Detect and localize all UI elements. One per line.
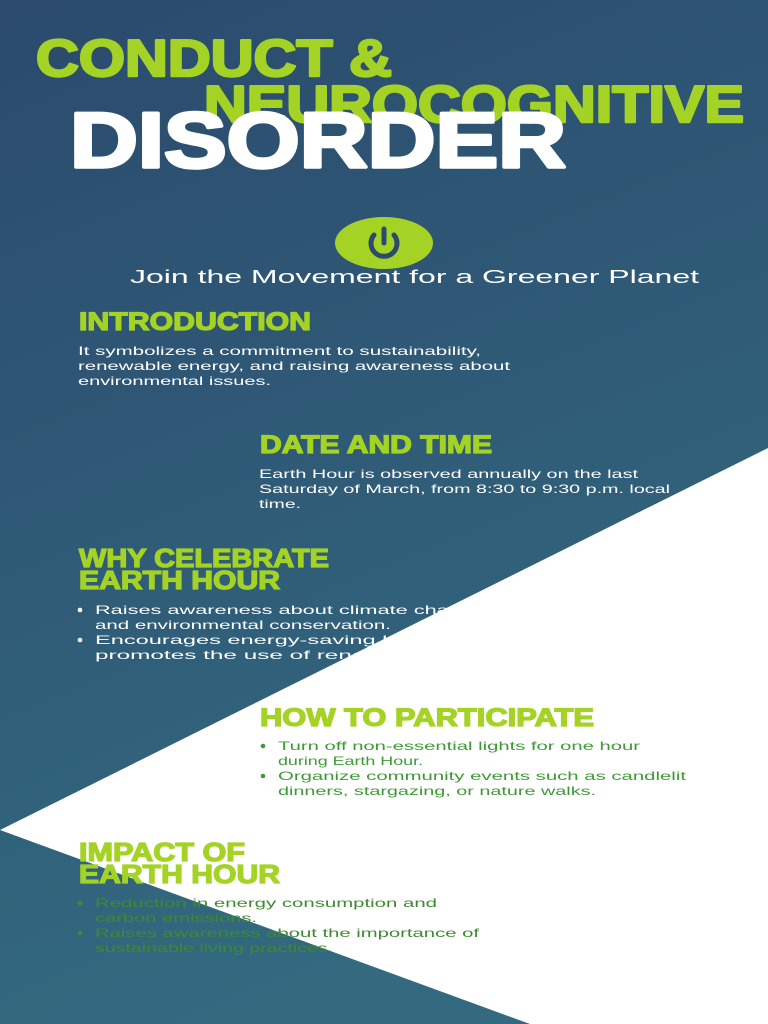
section: how to participate: HOW TO PARTICIPATE bbox=[260, 704, 594, 732]
section: date and time: time. bbox=[259, 497, 301, 511]
section: introduction: environmental issues. bbox=[78, 374, 271, 388]
section: date and time: Saturday of March, from 8:30 to 9:30 p.m. local bbox=[259, 482, 670, 496]
section: how to participate: Turn off non-essential lights for one hour bbox=[278, 739, 640, 753]
section: how to participate bbox=[260, 704, 687, 798]
section: impact: IMPACT OF bbox=[79, 837, 245, 867]
section: why celebrate: Encourages energy-saving habits and bbox=[95, 633, 491, 647]
icon: power button bbox=[335, 217, 433, 269]
section: introduction bbox=[78, 308, 511, 388]
section: date and time bbox=[259, 431, 670, 511]
section: impact: Raises awareness about the importance of bbox=[95, 926, 480, 940]
section: why celebrate bbox=[78, 543, 515, 662]
section: how to participate: Organize community events such as candlelit bbox=[278, 769, 687, 783]
section: how to participate: during Earth Hour. bbox=[278, 754, 423, 768]
title: CONDUCT & bbox=[36, 30, 392, 88]
section: why celebrate: WHY CELEBRATE bbox=[79, 543, 329, 573]
title bbox=[36, 30, 744, 184]
title: DISORDER bbox=[70, 96, 566, 184]
section: impact: sustainable living practices. bbox=[95, 941, 333, 955]
section: impact: carbon emissions. bbox=[95, 911, 257, 925]
section: impact bbox=[78, 837, 480, 955]
section: why celebrate: Raises awareness about climate change bbox=[95, 603, 486, 617]
section: how to participate: dinners, stargazing, or nature walks. bbox=[278, 784, 596, 798]
section: date and time: DATE AND TIME bbox=[260, 431, 492, 459]
tagline: Join the Movement for a Greener Planet bbox=[130, 267, 699, 287]
section: impact: Reduction in energy consumption and bbox=[95, 896, 437, 910]
section: introduction: renewable energy, and raising awareness about bbox=[78, 359, 511, 373]
section: introduction: INTRODUCTION bbox=[79, 308, 311, 336]
section: introduction: It symbolizes a commitment to sustainability, bbox=[78, 344, 481, 358]
section: why celebrate: promotes the use of renewable energy. bbox=[95, 648, 515, 662]
section: why celebrate: and environmental conservation. bbox=[95, 618, 391, 632]
title: NEUROCOGNITIVE bbox=[204, 76, 744, 134]
section: why celebrate: EARTH HOUR bbox=[79, 565, 280, 595]
white diagonal panel bbox=[0, 448, 768, 1024]
section: impact: EARTH HOUR bbox=[79, 859, 280, 889]
section: date and time: Earth Hour is observed annually on the last bbox=[259, 467, 639, 481]
